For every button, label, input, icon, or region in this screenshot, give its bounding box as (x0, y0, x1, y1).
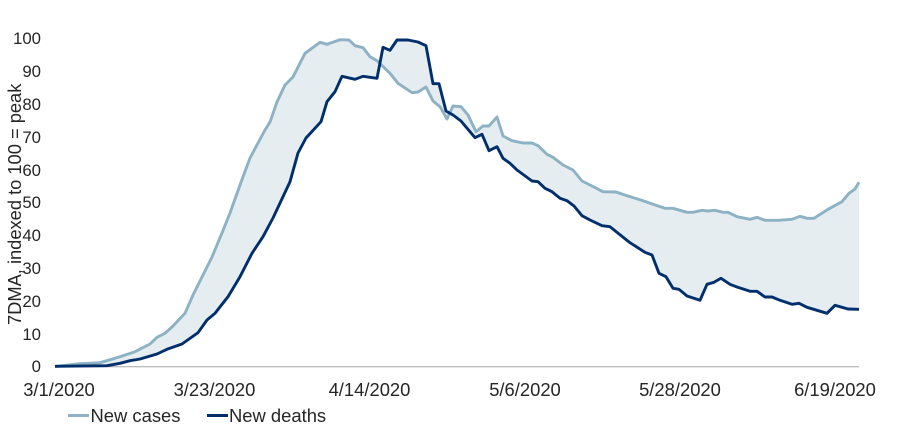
y axis tick labels (13, 29, 41, 376)
x axis date labels: 3/1/2020 (23, 379, 95, 400)
y axis tick labels: 50 (22, 193, 41, 212)
y axis tick labels: 60 (22, 161, 41, 180)
x axis date labels: 5/6/2020 (489, 379, 561, 400)
new deaths line (55, 40, 859, 366)
shaded area between the two series (55, 40, 859, 366)
x axis date labels (23, 379, 876, 400)
y axis tick labels: 70 (22, 128, 41, 147)
y axis tick labels: 0 (32, 357, 41, 376)
y axis tick labels: 30 (22, 259, 41, 278)
y axis tick labels: 10 (22, 325, 41, 344)
y axis title: 7DMA, indexed to 100 = peak (4, 83, 25, 325)
x axis line (55, 366, 859, 368)
y axis tick labels: 100 (13, 29, 41, 48)
x axis date labels: 4/14/2020 (329, 379, 410, 400)
new cases line (55, 40, 859, 366)
legend (68, 405, 326, 426)
legend: new cases: New cases (90, 405, 180, 426)
y axis tick labels: 20 (22, 292, 41, 311)
y axis tick labels: 40 (22, 226, 41, 245)
y axis tick labels: 90 (22, 62, 41, 81)
x axis date labels: 3/23/2020 (174, 379, 255, 400)
x axis date labels: 6/19/2020 (794, 379, 876, 400)
legend: new deaths: New deaths (229, 405, 326, 426)
x axis date labels: 5/28/2020 (639, 379, 721, 400)
y axis tick labels: 80 (22, 95, 41, 114)
